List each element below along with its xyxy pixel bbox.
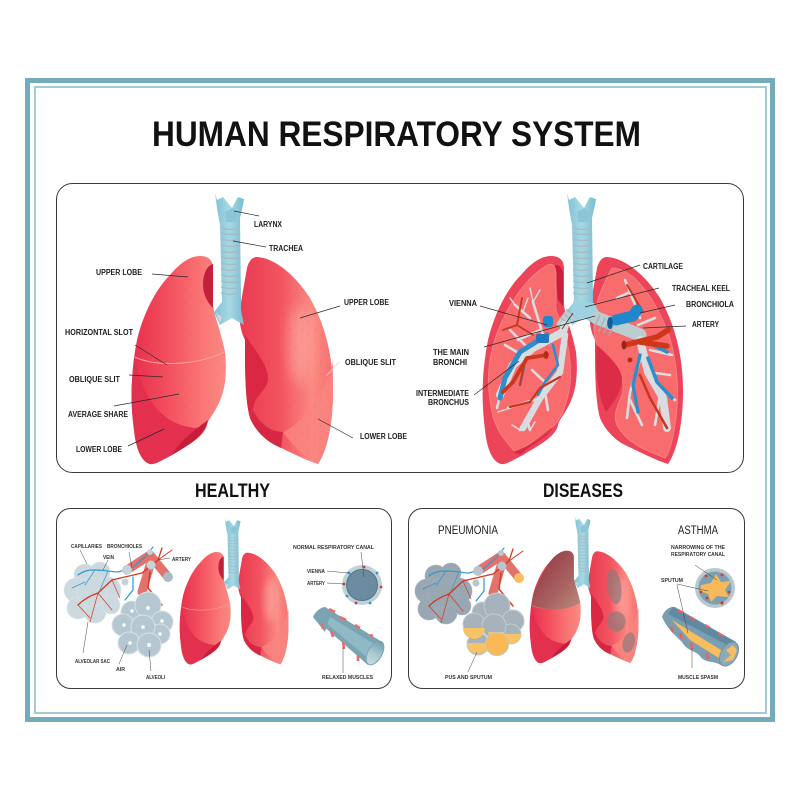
labels: MUSCLE SPASM	[678, 675, 718, 681]
pneumonia affected upper lobe	[532, 551, 580, 609]
labels with leader lines: BRONCHI	[433, 357, 467, 367]
title: HUMAN RESPIRATORY SYSTEM	[152, 115, 641, 154]
labels: NORMAL RESPIRATORY CANAL	[293, 545, 375, 551]
labels: PUS AND SPUTUM	[445, 675, 492, 681]
labels: RELAXED MUSCLES	[322, 675, 373, 681]
labels: VEIN	[103, 555, 114, 561]
inner frame	[35, 87, 766, 713]
labels with leader lines: BRONCHUS	[428, 397, 469, 407]
labels: RESPIRATORY CANAL	[671, 552, 726, 558]
panel: anatomy	[56, 184, 744, 472]
right lung section	[590, 257, 683, 464]
outer frame	[28, 80, 772, 720]
trachea	[214, 193, 245, 325]
labels with leader lines: TRACHEAL KEEL	[672, 283, 730, 293]
panel: healthy	[56, 508, 392, 688]
labels with leader lines: THE MAIN	[433, 347, 469, 357]
diagram: healthy lungs exterior	[65, 193, 407, 464]
heading: healthy: HEALTHY	[195, 481, 270, 502]
labels with leader lines: BRONCHIOLA	[686, 299, 734, 309]
labels with leader lines: TRACHEA	[269, 243, 303, 253]
labels: AIR	[116, 667, 125, 673]
infected alveolar sac	[415, 548, 524, 624]
labels: BRONCHIOLES	[107, 544, 142, 550]
asthma heading: ASTHMA	[678, 525, 718, 537]
alveolar sac with capillaries	[64, 547, 173, 623]
labels with leader lines: INTERMEDIATE	[416, 388, 469, 398]
labels with leader lines: AVERAGE SHARE	[68, 409, 128, 419]
labels with leader lines: LARYNX	[254, 219, 282, 229]
lungs with pneumonia and asthma patches	[530, 517, 639, 663]
labels: CAPILLARIES	[71, 544, 102, 550]
relaxed airway tube	[313, 607, 388, 668]
labels: NARROWING OF THE	[671, 545, 725, 551]
pneumonia heading: PNEUMONIA	[438, 525, 498, 537]
asthma canal cross-section	[695, 568, 735, 608]
labels with leader lines: LOWER LOBE	[360, 431, 407, 441]
labels with leader lines: UPPER LOBE	[344, 297, 389, 307]
labels	[445, 545, 726, 681]
healthy lungs mini	[180, 518, 289, 664]
labels with leader lines: OBLIQUE SLIT	[345, 357, 397, 367]
alveoli filled with pus	[463, 593, 524, 656]
labels with leader lines: LOWER LOBE	[76, 444, 122, 454]
lungs	[131, 256, 333, 464]
labels with leader lines	[416, 261, 734, 407]
bronchial tree: left	[497, 288, 565, 430]
alveoli cluster	[112, 592, 173, 657]
labels with leader lines: OBLIQUE SLIT	[69, 374, 121, 384]
labels: VIENNA	[307, 569, 325, 575]
bronchial tree: right	[594, 280, 675, 428]
labels with leader lines: UPPER LOBE	[96, 267, 142, 277]
heading: diseases: DISEASES	[543, 481, 623, 502]
labels with leader lines	[65, 211, 407, 454]
labels with leader lines: VIENNA	[449, 298, 477, 308]
labels: ARTERY	[172, 557, 191, 563]
asthma airway tube	[662, 607, 742, 669]
trachea and main bronchi	[560, 193, 600, 327]
panel: diseases	[408, 508, 744, 688]
labels: ALVEOLI	[146, 675, 165, 681]
labels	[71, 544, 375, 681]
labels with leader lines: CARTILAGE	[643, 261, 683, 271]
normal canal cross-section	[342, 565, 382, 605]
left lung section	[483, 256, 577, 464]
labels: SPUTUM	[661, 578, 683, 584]
labels with leader lines: ARTERY	[692, 319, 719, 329]
labels: ALVEOLAR SAC	[75, 659, 110, 665]
asthma patches	[605, 568, 637, 654]
labels with leader lines: HORIZONTAL SLOT	[65, 327, 134, 337]
diagram: lungs cross-section	[416, 193, 734, 464]
labels: ARTERY	[307, 581, 325, 587]
